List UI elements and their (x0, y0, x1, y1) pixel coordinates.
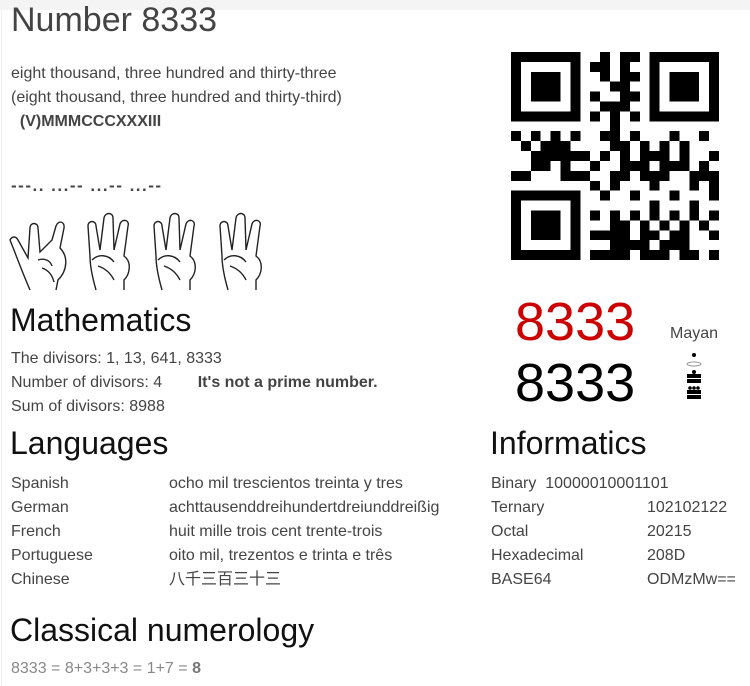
informatics table: 208D (647, 547, 685, 564)
left border (1, 10, 2, 686)
text block: divisors: Sum of divisors: 8988 (11, 398, 165, 415)
big number red: 8333 (515, 292, 635, 352)
icon: mayan numeral (686, 353, 702, 399)
top bar (0, 0, 750, 10)
languages table: Portuguese (11, 547, 93, 564)
informatics table (491, 475, 736, 588)
text block: divisors: Number of divisors: 4 It's not a prime number. (11, 374, 378, 391)
languages table: huit mille trois cent trente-trois (169, 523, 382, 540)
text block: number names: eight thousand, three hundred and thirty-three (11, 65, 337, 82)
morse code: ---.. ...-- ...-- ...-- (11, 176, 163, 195)
informatics table: Ternary (491, 499, 544, 516)
numerology text: 8333 = 8+3+3+3 = 1+7 = 8 (11, 660, 201, 677)
languages table: German (11, 499, 69, 516)
informatics table: BASE64 (491, 571, 551, 588)
informatics table: Octal (491, 523, 528, 540)
icon: sign language hands (9, 212, 262, 290)
big number black: 8333 (515, 353, 635, 413)
text block: number names (11, 65, 342, 130)
informatics table: Hexadecimal (491, 547, 583, 564)
heading: Classical numerology: Classical numerology (10, 612, 314, 648)
languages table: Chinese (11, 571, 70, 588)
heading: Languages: Languages (10, 425, 168, 461)
languages table (11, 475, 439, 588)
languages table: ocho mil trescientos treinta y tres (169, 475, 403, 492)
informatics table: 102102122 (647, 499, 727, 516)
mayan label: Mayan (670, 325, 718, 342)
title: Number 8333 (11, 1, 217, 39)
languages table: oito mil, trezentos e trinta e três (169, 547, 392, 564)
informatics table: 20215 (647, 523, 692, 540)
languages table: achttausenddreihundertdreiunddreißig (169, 499, 439, 516)
languages table: 八千三百三十三 (169, 571, 281, 588)
heading: Informatics: Informatics (490, 425, 646, 461)
informatics table: ODMzMw== (647, 571, 736, 588)
QR code (511, 52, 719, 260)
text block: divisors (11, 350, 378, 415)
languages table: French (11, 523, 61, 540)
text block: number names: (eight thousand, three hundred and thirty-third) (11, 89, 342, 106)
text block: divisors: The divisors: 1, 13, 641, 8333 (11, 350, 222, 367)
text block: number names: (V)MMMCCCXXXIII (20, 113, 161, 130)
heading: Mathematics: Mathematics (10, 302, 191, 338)
languages table: Spanish (11, 475, 69, 492)
informatics table: Binary 10000010001101 (491, 475, 669, 492)
